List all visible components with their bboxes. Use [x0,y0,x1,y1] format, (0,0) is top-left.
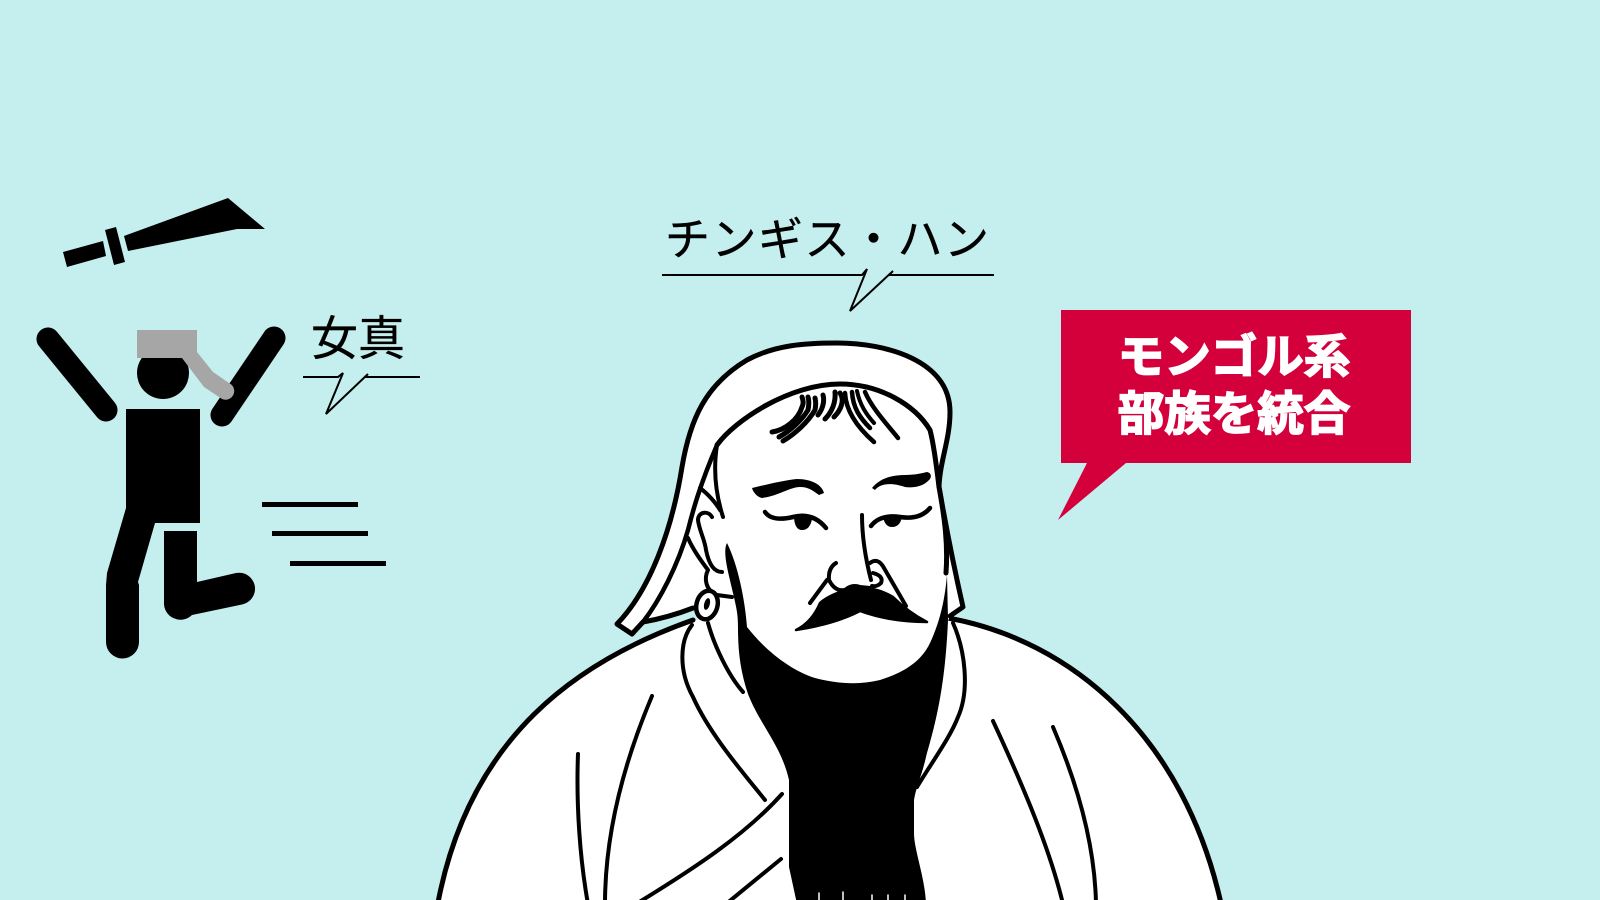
label: genghis khan: チンギス・ハン [665,214,989,265]
callout text [1118,331,1350,440]
right arm [222,338,274,415]
mustache [796,588,927,630]
jurchen warrior figure [48,330,274,658]
speech line [662,269,994,311]
label: jurchen: 女真 [311,312,405,365]
robe outline [437,618,1222,900]
robe fold lines [577,696,1096,900]
hood outline and strap [617,343,963,634]
label: jurchen [303,312,420,414]
eyebrows [752,472,931,498]
bent leg [164,531,255,620]
headband [137,330,234,400]
ear and hood seam [688,445,732,597]
collar [682,623,965,800]
face outline [717,384,947,573]
speech line [303,373,420,414]
eyes [765,508,930,530]
speed lines [262,502,386,566]
earring [693,588,721,622]
portrait: genghis khan [437,343,1222,900]
back leg [106,508,155,658]
nose [810,515,906,606]
hood inner edge [643,445,717,622]
hood fill [617,343,963,640]
face [705,384,947,680]
beard tip notches [819,892,905,900]
forehead hair [772,391,898,442]
left arm [48,339,106,410]
head [137,347,189,399]
robe body [437,618,1222,900]
callout text: モンゴル系 [1118,331,1350,383]
icon: sword [63,198,265,267]
callout text: 部族を統合 [1118,388,1350,440]
label: genghis khan [662,214,994,311]
callout: red speech bubble [1058,310,1411,520]
torso [126,409,200,523]
beard and sideburns [725,543,948,900]
